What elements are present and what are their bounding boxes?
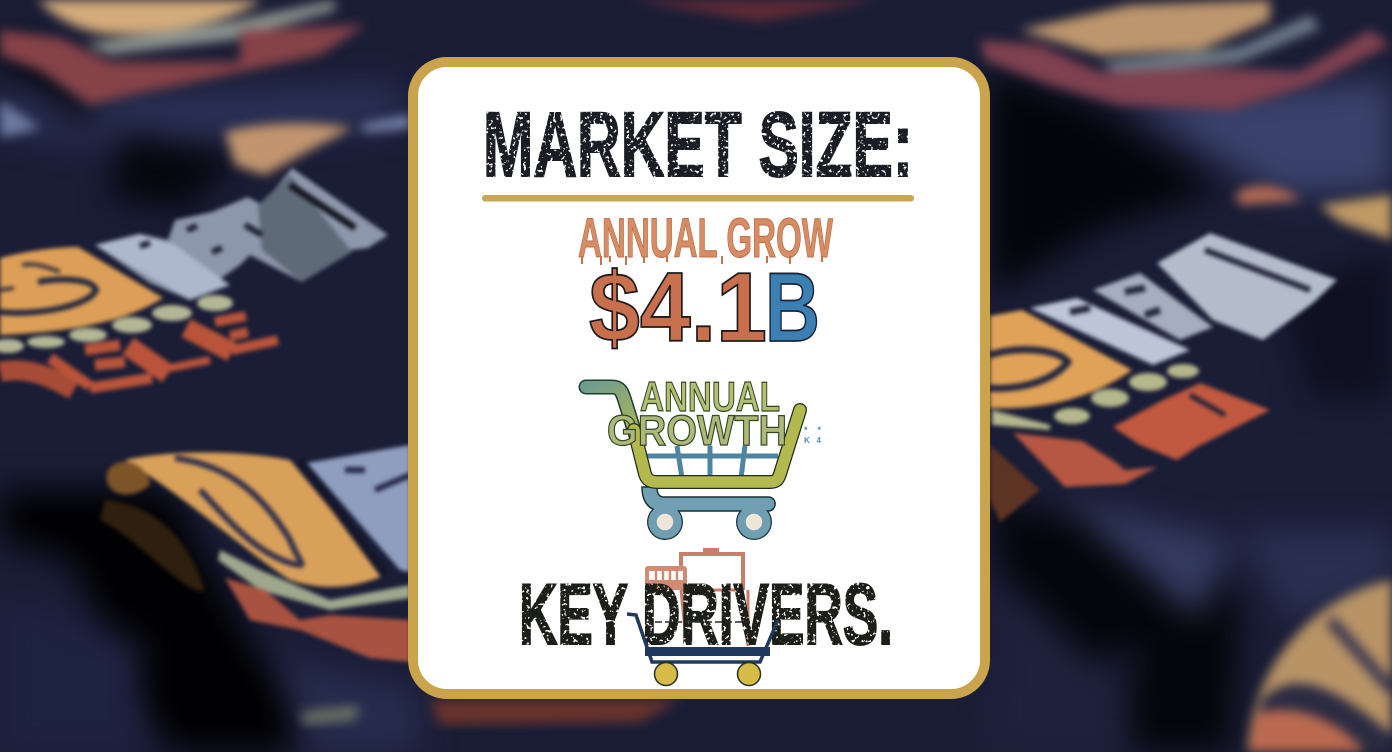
grey lettering <box>307 445 410 572</box>
cart basket <box>634 410 800 482</box>
red lettering <box>0 316 278 390</box>
right logo patch <box>990 233 1337 522</box>
top-right blurred print <box>980 0 1392 240</box>
cart handle <box>586 387 634 430</box>
dripping label: annual grow: ANNUAL GROW <box>578 206 833 269</box>
cart base and wheels <box>647 504 683 540</box>
green dots <box>0 295 233 353</box>
green dots <box>992 364 1199 430</box>
label: growth: GROWTH <box>607 407 787 455</box>
red lettering <box>1013 433 1157 487</box>
tiny marks: ** <box>804 425 821 435</box>
heading: key drivers: KEY DRIVERS. <box>519 567 893 663</box>
label: annual: ANNUAL <box>640 373 780 420</box>
grey lettering <box>95 168 388 300</box>
big number: $4.1B: B <box>765 252 820 362</box>
top-left blurred print <box>0 0 880 175</box>
icon: navy shopping cart <box>627 614 778 686</box>
orange badge <box>125 452 385 587</box>
dripping label: annual grow <box>578 206 833 269</box>
icon: shopping cart with annual growth <box>586 373 822 540</box>
red lettering <box>225 578 410 662</box>
green dots <box>218 550 410 610</box>
bottom-right dome print <box>1248 580 1392 752</box>
icon: shopping cart with annual growth: K4 <box>804 436 822 445</box>
orange badge <box>0 247 163 335</box>
big number: $4.1B: $4.1 <box>589 252 767 362</box>
grey lettering <box>1030 298 1190 365</box>
bottom-left logo patch <box>100 445 680 725</box>
divider line <box>482 195 914 202</box>
title: market size: MARKET SIZE: <box>483 94 913 196</box>
orange badge <box>990 310 1132 408</box>
left logo patch <box>0 168 388 390</box>
cart wire grid <box>644 446 778 478</box>
card panel <box>413 62 985 694</box>
icon: pink boxes behind key drivers <box>645 548 748 646</box>
